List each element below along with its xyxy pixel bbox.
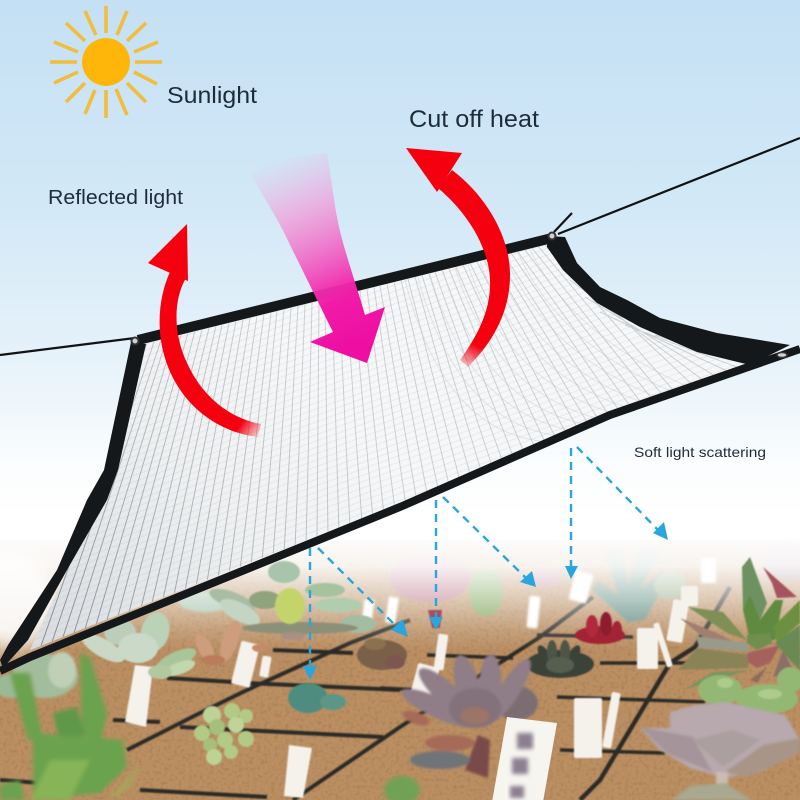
icon: sun <box>50 6 162 118</box>
plant: red succulent <box>575 612 625 644</box>
label: Cut off heat: Cut off heat <box>409 106 539 133</box>
plant stem: reddish <box>428 610 442 628</box>
plant: yellow-green rosette <box>207 561 376 640</box>
plant labels (white tags) <box>125 586 698 798</box>
plant: dark rosette <box>526 640 594 678</box>
plant: front blurred green <box>0 653 420 800</box>
arrow: cut off heat (red) <box>406 148 510 367</box>
plant: teal cluster <box>288 683 346 713</box>
plant: big purple rosette <box>398 652 538 778</box>
label: Sunlight: Sunlight <box>167 82 258 108</box>
arrow: reflected light (red) <box>148 224 261 437</box>
back plants (misted) <box>179 540 800 629</box>
ground: soil beds and trays <box>0 540 800 800</box>
arrow: sunlight entering (pink) <box>250 153 385 363</box>
plant label: large front tag with blurred marks <box>492 717 557 800</box>
mist over the far ground <box>0 530 800 650</box>
label: Soft light scattering: Soft light scattering <box>634 444 766 460</box>
shade net <box>30 244 742 650</box>
label: Reflected light: Reflected light <box>48 187 183 209</box>
plant: green beads <box>194 703 254 765</box>
plant: pale rosette at left <box>0 652 78 698</box>
plant: brown rosette <box>357 638 407 670</box>
rope <box>0 138 800 355</box>
plant: pale green rosette <box>78 609 199 679</box>
net border: black binding and grommets <box>0 232 800 671</box>
plant: light green cluster <box>698 667 800 714</box>
plant: front purple rosette <box>640 702 800 800</box>
plant: pink succulent <box>191 619 268 665</box>
left mist corner <box>0 550 60 650</box>
plant: large green and red <box>678 557 800 690</box>
arrows: scattered light (blue dashed) <box>303 447 668 680</box>
